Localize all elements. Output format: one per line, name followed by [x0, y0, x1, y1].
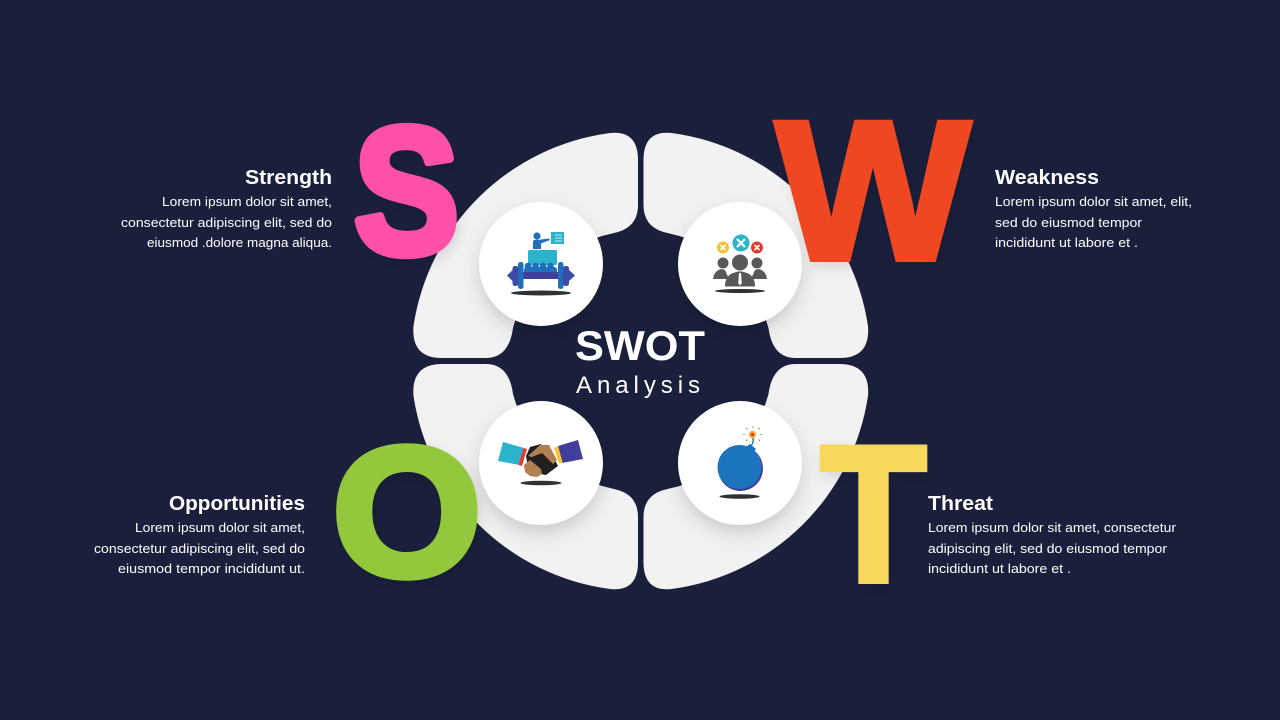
text block: weakness: Lorem ipsum dolor sit amet, elit,: [995, 194, 1192, 209]
text block: opportunities: Lorem ipsum dolor sit amet,: [135, 520, 305, 535]
text block: strength: eiusmod .dolore magna aliqua.: [147, 235, 332, 250]
text block: strength: [121, 167, 332, 250]
letter W: W: [776, 80, 970, 301]
icon circle: opportunities: [479, 401, 603, 525]
text block: threat: Threat: [928, 493, 993, 515]
blade: weakness: [644, 133, 868, 358]
letter T: T: [820, 406, 926, 623]
letter O: O: [332, 409, 482, 614]
text block: strength: Lorem ipsum dolor sit amet,: [162, 194, 332, 209]
text block: threat: adipiscing elit, sed do eiusmod tempor: [928, 541, 1168, 556]
blade: strength: [413, 133, 638, 358]
icon: team with crosses: [713, 234, 767, 293]
text block: weakness: incididunt ut labore et .: [995, 235, 1138, 250]
letter S: S: [354, 91, 459, 292]
icon circle: strength: [479, 202, 603, 326]
center title: [575, 322, 705, 399]
icon: presenter on barbell: [507, 232, 575, 296]
text block: weakness: Weakness: [995, 167, 1099, 189]
text block: weakness: [995, 167, 1192, 250]
icon circle: threat: [678, 401, 802, 525]
icon: handshake: [498, 440, 583, 485]
blade: threat: [644, 364, 868, 589]
text block: strength: consectetur adipiscing elit, sed do: [121, 215, 332, 230]
icon: bomb: [718, 426, 763, 499]
blade: opportunities: [413, 364, 638, 589]
text block: opportunities: eiusmod tempor incididunt ut.: [118, 561, 305, 576]
icon circle: weakness: [678, 202, 802, 326]
text block: opportunities: consectetur adipiscing elit, sed do: [94, 541, 305, 556]
center title: SWOT: [575, 322, 705, 369]
text block: weakness: sed do eiusmod tempor: [995, 215, 1143, 230]
text block: opportunities: Opportunities: [169, 493, 305, 515]
text block: opportunities: [94, 493, 305, 576]
center title: Analysis: [576, 372, 700, 399]
ring of four blades: [413, 133, 868, 589]
text block: strength: Strength: [245, 167, 332, 189]
text block: threat: [928, 493, 1177, 576]
text block: threat: Lorem ipsum dolor sit amet, consectetur: [928, 520, 1177, 535]
text block: threat: incididunt ut labore et .: [928, 561, 1071, 576]
